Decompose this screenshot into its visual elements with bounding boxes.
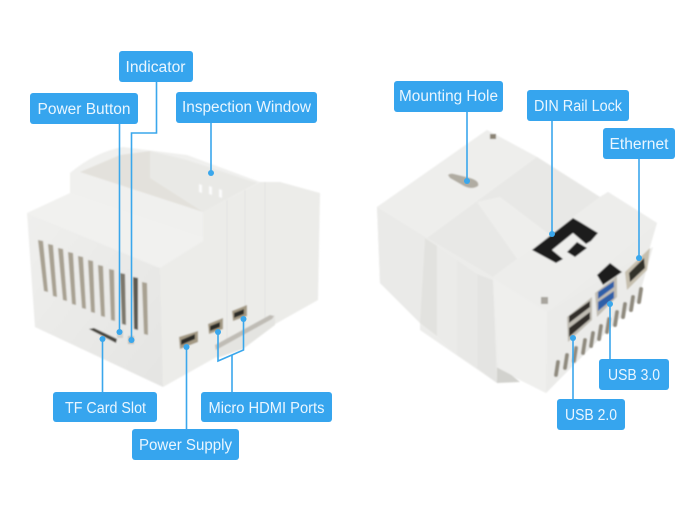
callout: TF Card Slot — [53, 336, 157, 422]
left device: case front view — [27, 147, 320, 387]
callout: Power Button: Power Button — [38, 101, 130, 118]
callout: Mounting Hole: Mounting Hole — [399, 88, 498, 105]
callout: Inspection Window — [176, 92, 317, 176]
micro HDMI port 1 — [208, 318, 223, 334]
mounting plate — [377, 130, 537, 238]
screw hole — [490, 134, 496, 139]
callout: TF Card Slot: TF Card Slot — [65, 400, 147, 417]
inspection window opening — [80, 151, 257, 212]
case silhouette — [377, 130, 657, 393]
callout: Power Supply: Power Supply — [139, 437, 232, 454]
USB 2.0 port — [567, 297, 592, 342]
callout: USB 2.0 — [557, 335, 625, 430]
callout: Mounting Hole — [394, 81, 503, 184]
rib panels — [420, 238, 437, 336]
callout: Micro HDMI Ports: Micro HDMI Ports — [208, 400, 325, 417]
callout: Micro HDMI Ports — [201, 316, 332, 422]
rail notch — [497, 366, 520, 383]
callout: Power Button — [30, 93, 138, 335]
USB-C power port — [179, 331, 198, 349]
case vented face — [27, 213, 163, 387]
side ribs — [227, 182, 265, 345]
callout: Power Supply — [132, 344, 239, 460]
TF card slot — [89, 328, 117, 343]
connector end plate — [493, 192, 657, 312]
callout: USB 3.0 — [599, 301, 669, 390]
DIN rail lock — [532, 218, 598, 263]
callout: Indicator: Indicator — [126, 59, 186, 76]
indicator hole — [128, 336, 134, 344]
rail notch — [215, 315, 275, 358]
inspection window surround — [70, 147, 260, 238]
ethernet port — [625, 248, 650, 290]
corner screw hole — [541, 297, 548, 304]
case right side face — [158, 182, 320, 387]
callout: Ethernet — [603, 128, 675, 261]
USB 3.0 port — [595, 276, 617, 317]
inspection window slots — [199, 184, 222, 198]
end vents — [556, 289, 641, 375]
callout: DIN Rail Lock — [527, 90, 629, 237]
mounting hole — [448, 174, 478, 188]
callout: USB 3.0: USB 3.0 — [608, 367, 660, 384]
ventilation slots — [38, 240, 148, 335]
callout: Inspection Window: Inspection Window — [182, 99, 312, 116]
callout: Indicator — [119, 51, 193, 343]
micro HDMI port 2 — [232, 305, 247, 321]
callout: USB 2.0: USB 2.0 — [565, 407, 617, 424]
power button — [117, 330, 123, 338]
lock tab — [597, 263, 622, 285]
case top ledge — [27, 193, 203, 268]
right end face — [493, 278, 547, 393]
callout: Ethernet: Ethernet — [610, 136, 669, 153]
recessed rail channel — [427, 157, 600, 277]
left side panel — [377, 207, 425, 323]
right device: case rear view — [377, 130, 657, 393]
callout: DIN Rail Lock: DIN Rail Lock — [534, 98, 622, 115]
